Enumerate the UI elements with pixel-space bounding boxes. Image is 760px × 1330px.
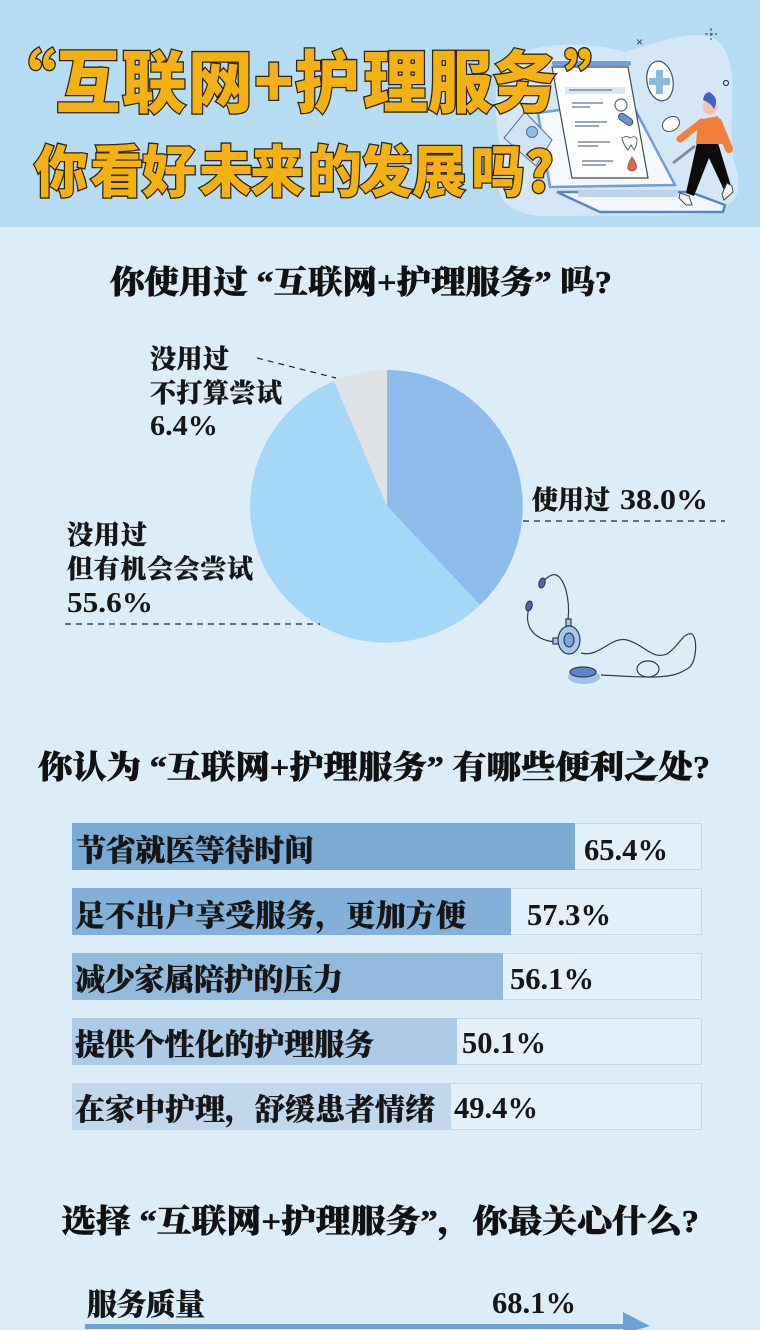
label: not used, may try [65,520,320,624]
bar: soothe emotions: 在家中护理，舒缓患者情绪 [75,1093,435,1128]
illustration: doctor with medical record on laptop: × [636,35,643,49]
label: not used, may try: 但有机会会尝试 [67,554,253,584]
label: used [523,485,725,521]
bar: service at home [72,888,702,935]
label: not used, may try: 55.6% [67,588,153,619]
bar: less family pressure: 56.1% [510,961,594,996]
bar: save waiting time: 65.4% [584,832,668,867]
bar: save waiting time: 节省就医等待时间 [76,834,314,868]
header banner [0,0,760,227]
bar: personalised care: 50.1% [462,1025,546,1060]
row: service quality: 68.1% [492,1285,576,1320]
label: not used, no plan: 没用过 [150,344,229,374]
label: not used, no plan: 不打算尝试 [150,378,282,408]
label: used: 38.0% [620,485,708,516]
heading: usage question: 你使用过 “互联网+护理服务” 吗? [110,264,612,300]
bar: less family pressure: 减少家属陪护的压力 [75,963,343,997]
bar: service at home: 57.3% [527,897,611,932]
bar: soothe emotions: 49.4% [454,1090,538,1125]
row: service quality [85,1285,650,1330]
title line 1: “互联网+护理服务” [0,29,629,127]
label: not used, no plan [150,344,336,442]
bar chart: conveniences [72,823,702,1130]
pie chart [250,370,523,643]
title line 2: 你看好未来的发展吗? [34,127,554,208]
label: not used, may try: 没用过 [67,520,147,550]
illustration: doctor with medical record on laptop [496,28,739,216]
icon: stethoscope [525,575,696,684]
bar: personalised care [72,1018,702,1065]
bar: less family pressure [72,953,702,1000]
label: not used, no plan: 6.4% [150,411,218,442]
heading: conveniences question: 你认为 “互联网+护理服务” 有哪些便利之处? [38,749,710,785]
bar: personalised care: 提供个性化的护理服务 [75,1029,374,1062]
heading: concerns question: 选择 “互联网+护理服务”，你最关心什么? [61,1203,699,1241]
row: service quality: 服务质量 [87,1288,205,1322]
label: used: 使用过 [532,485,610,515]
bar: service at home: 足不出户享受服务，更加方便 [75,899,466,934]
bar: soothe emotions [72,1083,702,1130]
bar: save waiting time [72,823,702,870]
